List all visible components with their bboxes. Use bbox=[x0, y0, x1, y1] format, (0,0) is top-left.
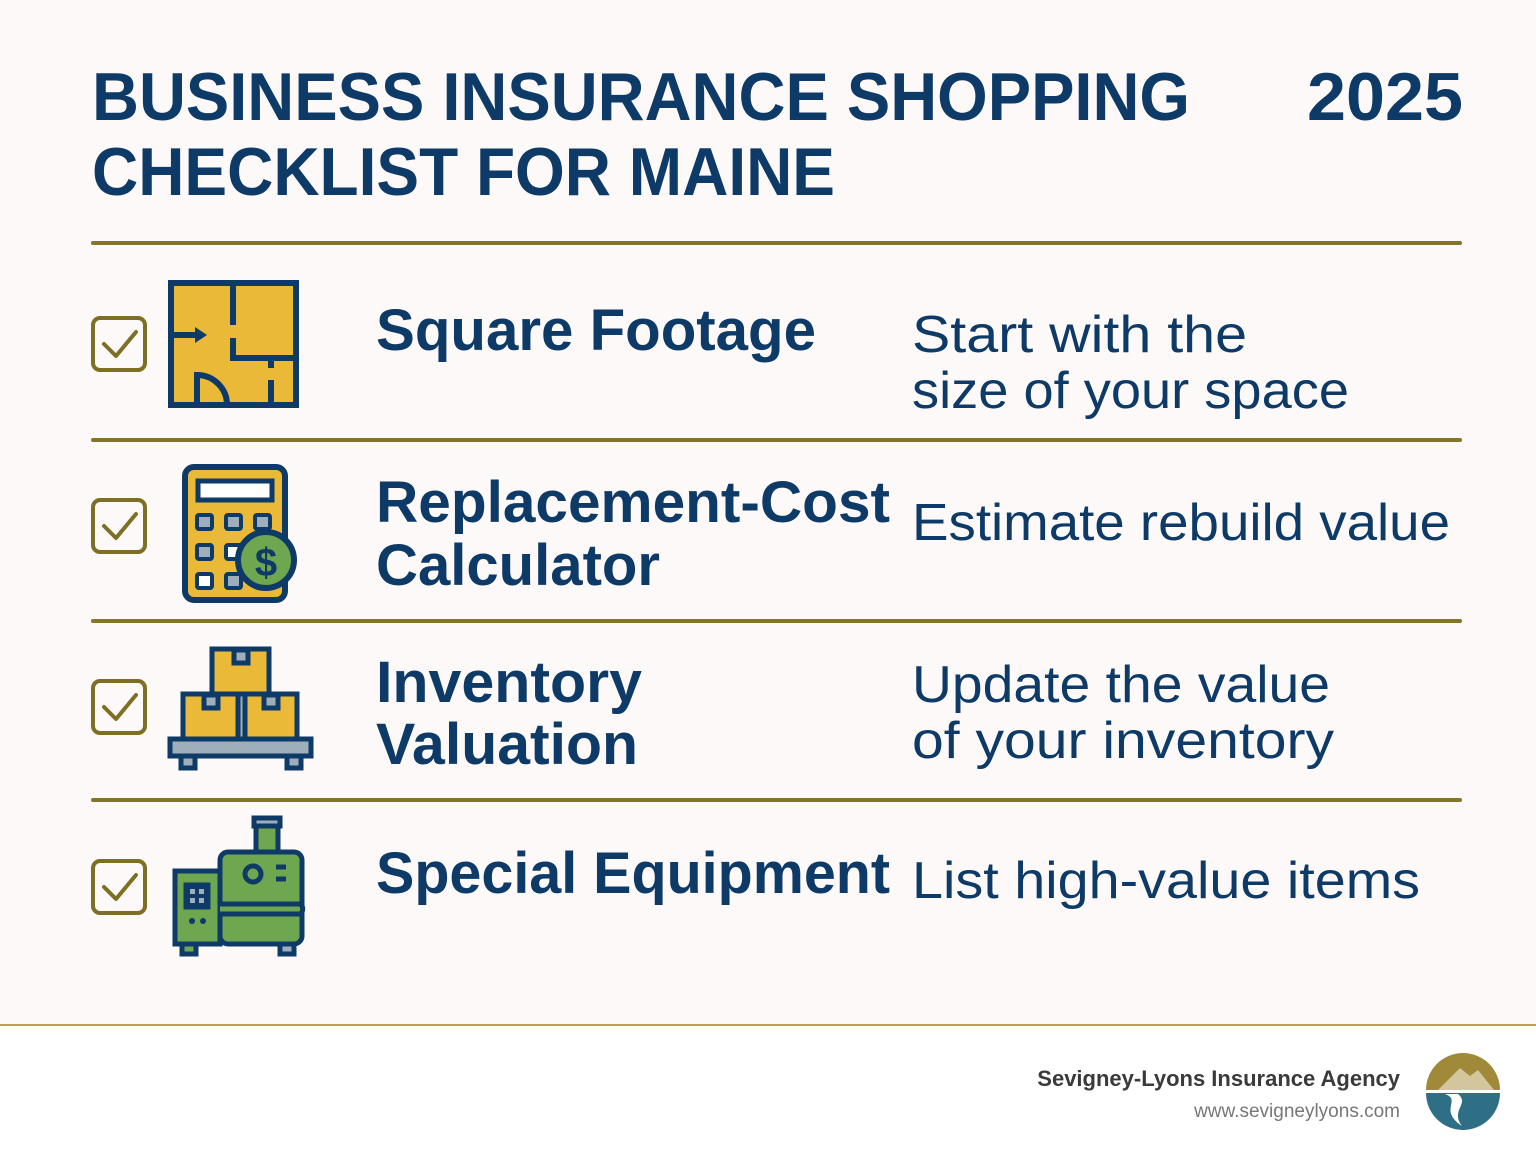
description: Update the value bbox=[912, 656, 1330, 714]
heading: special equipment: Special Equipment bbox=[376, 841, 890, 906]
description: of your inventory bbox=[912, 712, 1334, 770]
heading: replacement cost bbox=[376, 470, 890, 598]
title bbox=[92, 59, 1463, 210]
row: inventory bbox=[93, 649, 1334, 777]
footer: agency name: Sevigney-Lyons Insurance Agency bbox=[1037, 1066, 1401, 1091]
row: square footage bbox=[93, 283, 1349, 420]
row: replacement cost bbox=[93, 467, 1450, 600]
heading: inventory: Inventory bbox=[376, 650, 642, 715]
footer: agency name bbox=[1037, 1066, 1401, 1122]
checkbox 1 bbox=[93, 318, 145, 370]
icon: machine bbox=[175, 818, 303, 954]
icon: boxes on pallet bbox=[170, 649, 311, 768]
checkbox 3 bbox=[93, 681, 145, 733]
heading: replacement cost: Replacement-Cost bbox=[376, 470, 890, 535]
heading: square footage: Square Footage bbox=[376, 298, 816, 363]
footer: agency name: www.sevigneylyons.com bbox=[1193, 1101, 1400, 1122]
icon: calculator: $ bbox=[255, 541, 277, 585]
description: List high-value items bbox=[912, 852, 1420, 910]
checkbox 4 bbox=[93, 861, 145, 913]
description bbox=[912, 656, 1334, 770]
checkbox 2 bbox=[93, 500, 145, 552]
description bbox=[912, 306, 1349, 420]
heading: inventory: Valuation bbox=[376, 712, 638, 777]
title: CHECKLIST FOR MAINE bbox=[92, 134, 835, 210]
description: Start with the bbox=[912, 306, 1247, 364]
icon: calculator bbox=[185, 467, 294, 600]
title: 2025 bbox=[1307, 59, 1463, 135]
description: size of your space bbox=[912, 362, 1349, 420]
description: Estimate rebuild value bbox=[912, 494, 1450, 552]
heading: inventory bbox=[376, 650, 642, 777]
icon: floor plan bbox=[171, 283, 296, 405]
title: BUSINESS INSURANCE SHOPPING bbox=[92, 59, 1190, 135]
row: special equipment bbox=[93, 818, 1420, 954]
heading: replacement cost: Calculator bbox=[376, 533, 660, 598]
logo bbox=[1426, 1053, 1500, 1130]
